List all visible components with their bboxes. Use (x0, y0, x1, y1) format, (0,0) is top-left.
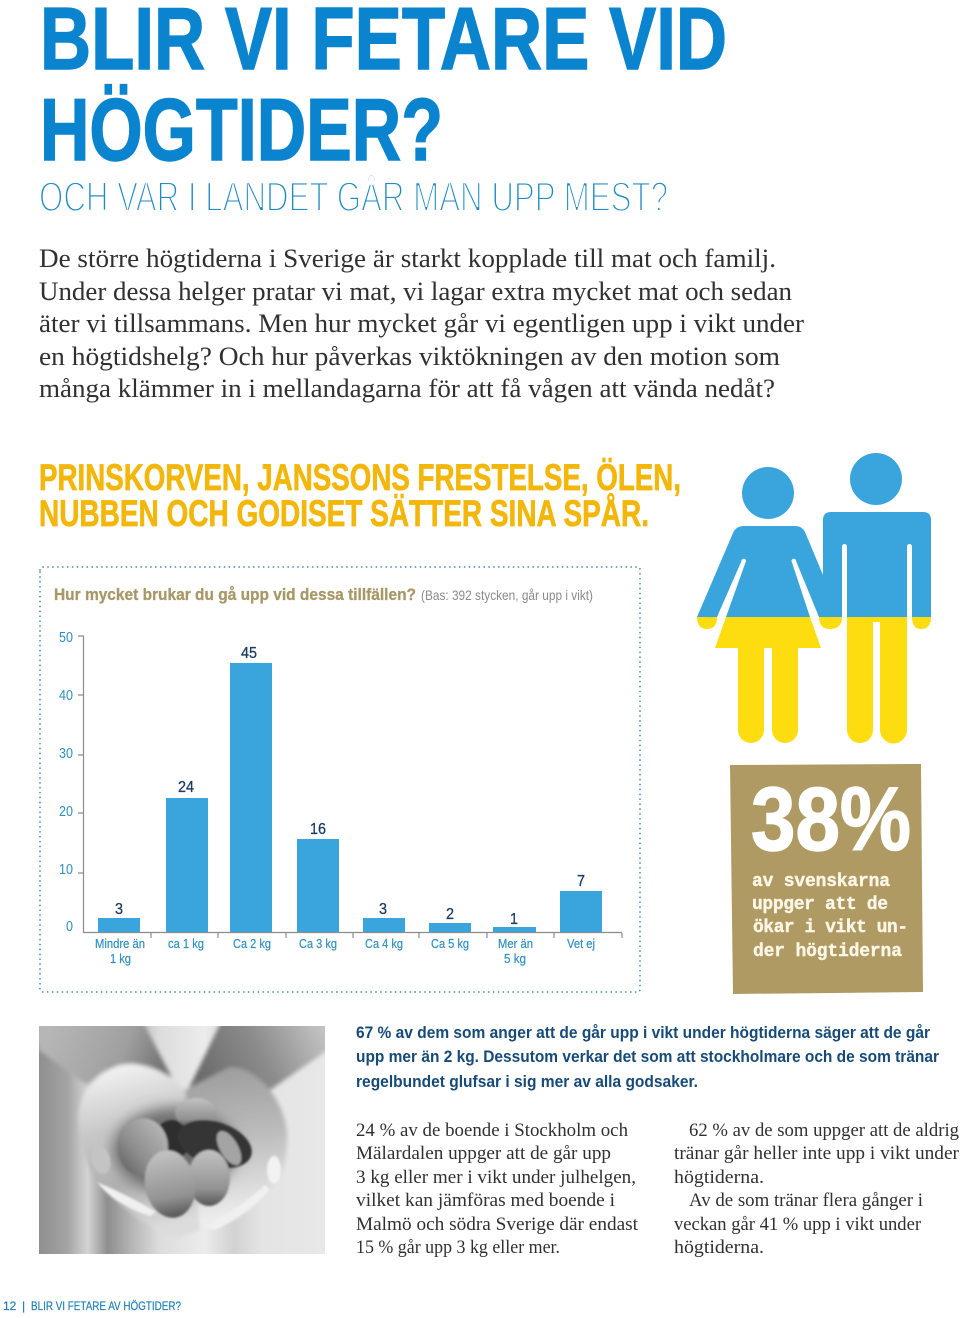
text column right: tränar går heller inte upp i vikt under (674, 1143, 960, 1164)
intro text: Under dessa helger pratar vi mat, vi lagar extra mycket mat och sedan (39, 277, 792, 306)
section heading: PRINSKORVEN, JANSSONS FRESTELSE, ÖLEN, (39, 457, 681, 498)
category labels: Ca 5 kg (431, 937, 469, 951)
category labels: ca 1 kg (168, 937, 204, 951)
text column left: 15 % går upp 3 kg eller mer. (356, 1237, 560, 1258)
category labels: 5 kg (504, 952, 526, 966)
text column right: 62 % av de som uppger att de aldrig (689, 1120, 959, 1141)
text column right: Av de som tränar flera gånger i (689, 1190, 923, 1211)
intro text: många klämmer in i mellandagarna för att få vågen att vända nedåt? (39, 374, 775, 403)
y axis labels (59, 630, 73, 935)
footer: 12 (3, 1299, 17, 1313)
intro text (39, 244, 804, 403)
section heading: NUBBEN OCH GODISET SÄTTER SINA SPÅR. (39, 493, 649, 534)
bar chart (59, 630, 622, 966)
category labels: 1 kg (110, 952, 131, 966)
key finding text (356, 1023, 939, 1091)
icon: man (819, 453, 931, 744)
text column right (674, 1120, 960, 1258)
category labels: Vet ej (567, 937, 595, 951)
category labels: Ca 3 kg (299, 937, 337, 951)
text column left: 24 % av de boende i Stockholm och (356, 1120, 628, 1141)
y axis labels: 50 (59, 630, 73, 646)
intro text: De större högtiderna i Sverige är starkt kopplade till mat och familj. (39, 244, 776, 273)
chart title: Hur mycket brukar du gå upp vid dessa tillfällen? (54, 585, 416, 604)
y axis labels: 0 (66, 919, 73, 935)
y axis labels: 30 (59, 746, 73, 762)
subtitle: OCH VAR I LANDET GÅR MAN UPP MEST? (39, 173, 668, 220)
icon: woman (697, 467, 823, 743)
axes (78, 636, 622, 938)
bar values: 16 (310, 821, 326, 838)
y axis labels: 10 (59, 862, 73, 878)
text column left: Malmö och södra Sverige där endast (356, 1214, 639, 1235)
category labels: Mindre än (95, 937, 145, 951)
text column left: vilket kan jämföras med boende i (356, 1190, 615, 1211)
callout: 38 percent: der högtiderna (753, 942, 902, 962)
bar values: 1 (510, 911, 518, 928)
bar values: 24 (178, 779, 194, 796)
intro text: äter vi tillsammans. Men hur mycket går vi egentligen upp i vikt under (39, 309, 804, 338)
text column left: 3 kg eller mer i vikt under julhelgen, (356, 1167, 636, 1188)
bar values: 2 (446, 906, 454, 923)
callout: 38 percent: av svenskarna (752, 872, 890, 892)
bars (98, 663, 602, 932)
icon: woman and man figures (697, 453, 931, 744)
section heading (39, 457, 681, 534)
footer: BLIR VI FETARE AV HÖGTIDER? (31, 1299, 181, 1313)
text column right: veckan går 41 % upp i vikt under (674, 1214, 922, 1235)
callout: 38 percent (730, 764, 923, 994)
text column left (356, 1120, 639, 1258)
y axis labels: 40 (59, 688, 73, 704)
text column right: högtiderna. (674, 1167, 764, 1188)
bar values: 3 (115, 901, 123, 918)
intro text: en högtidshelg? Och hur påverkas viktökningen av den motion som (39, 342, 780, 371)
shadow inside the hands (113, 1108, 237, 1192)
callout: 38 percent: uppger att de (752, 895, 888, 915)
footer: | (22, 1299, 25, 1313)
callout: 38 percent: ökar i vikt un- (753, 918, 908, 938)
panel: bar chart frame (40, 567, 640, 992)
bar values (115, 645, 585, 928)
bar values: 7 (577, 873, 585, 890)
text column left: Mälardalen uppger att de går upp (356, 1143, 611, 1164)
bar values: 3 (379, 901, 387, 918)
title: HÖGTIDER? (40, 80, 443, 179)
y axis labels: 20 (59, 804, 73, 820)
chart title: (Bas: 392 stycken, går upp i vikt) (421, 587, 593, 603)
key finding text: regelbundet glufsar i sig mer av alla godsaker. (356, 1072, 698, 1091)
category labels: Ca 2 kg (233, 937, 271, 951)
category labels: Ca 4 kg (365, 937, 403, 951)
category labels: Mer än (498, 937, 533, 951)
photo: hands holding walnuts (30, 1020, 335, 1254)
bar values: 45 (241, 645, 257, 662)
title (40, 0, 727, 179)
text column right: högtiderna. (674, 1237, 764, 1258)
callout: 38 percent: 38% (751, 770, 911, 870)
category labels (95, 937, 595, 966)
